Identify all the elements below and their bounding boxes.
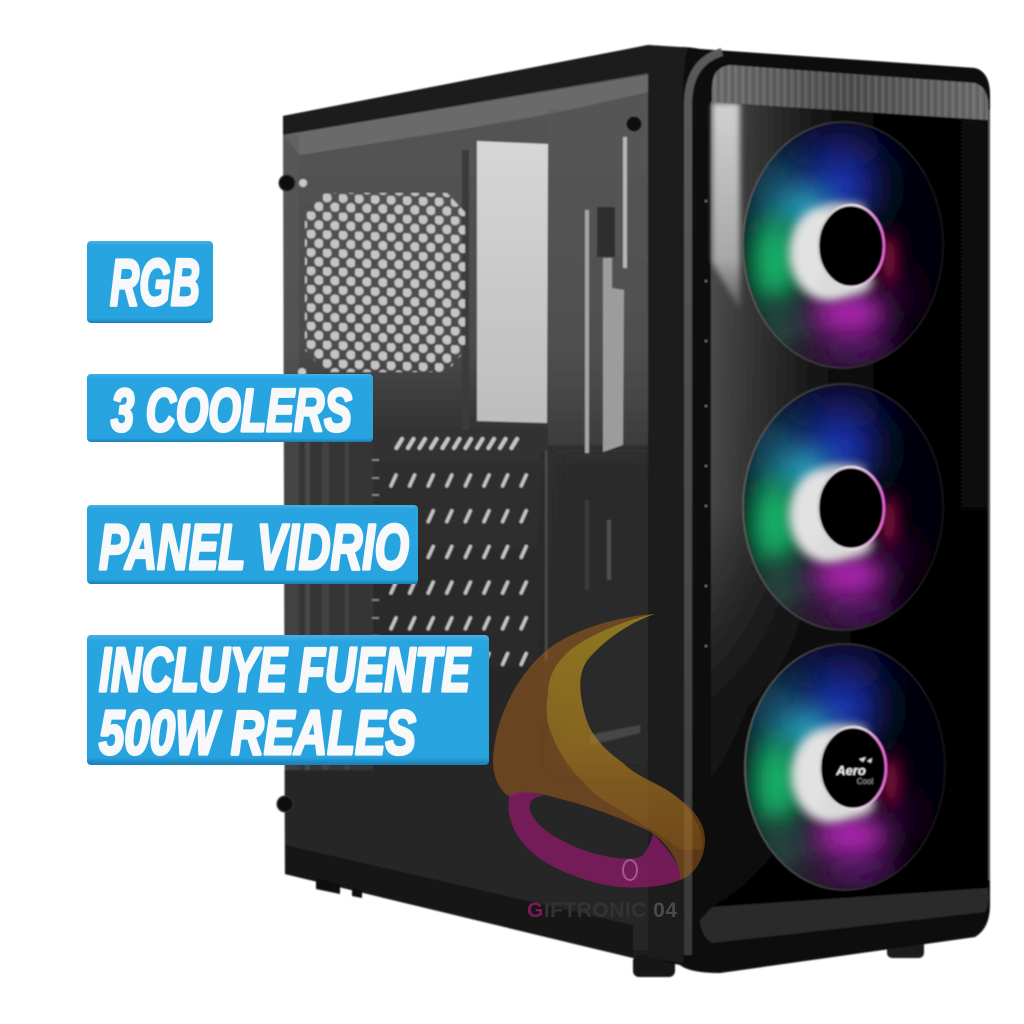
label: 3 COOLERS [87, 374, 373, 444]
watermark text: GIFTRONIC 04 [527, 899, 677, 922]
slot row [394, 437, 520, 450]
watermark logo [493, 614, 705, 888]
label: INCLUYE FUENTE 500W REALES [87, 635, 489, 768]
panel: glass side of the case [277, 45, 655, 958]
fan 1 [741, 121, 943, 377]
screw top left [279, 175, 295, 191]
olive inner swoosh [546, 614, 702, 850]
fan 2 [741, 383, 943, 639]
purple ring [508, 791, 680, 888]
label: RGB [87, 241, 213, 323]
label: INCLUYE FUENTE 500W REALES: INCLUYE FUENTE [99, 636, 471, 705]
front dots [705, 200, 707, 647]
foot right [887, 935, 924, 958]
logo [835, 757, 873, 786]
pink screw mark [623, 860, 637, 880]
label: PANEL VIDRIO [87, 505, 418, 584]
label: PANEL VIDRIO: PANEL VIDRIO [99, 511, 409, 583]
fan 3 [743, 643, 945, 899]
feet left [316, 878, 362, 898]
screw top right [626, 116, 642, 132]
foot [633, 955, 675, 977]
brown outer swoosh [493, 614, 705, 880]
PC case [277, 45, 990, 977]
brushed top band [712, 65, 988, 120]
glass reflection [712, 103, 740, 310]
front panel [648, 45, 990, 973]
glass right edge [988, 110, 990, 880]
screw lower left [277, 796, 293, 812]
label: RGB: RGB [110, 245, 200, 319]
label: INCLUYE FUENTE 500W REALES: 500W REALES [99, 699, 416, 768]
label: 3 COOLERS: 3 COOLERS [111, 377, 352, 444]
light window [477, 141, 548, 423]
PSU vent holes [305, 193, 465, 372]
notches [372, 460, 379, 636]
slot grid [388, 472, 528, 668]
logo: Aero [835, 763, 866, 778]
logo: Cool [857, 777, 873, 786]
glass [711, 102, 988, 907]
standoffs [302, 183, 303, 372]
top edge of the case [283, 45, 650, 135]
bottom bar [700, 888, 989, 943]
